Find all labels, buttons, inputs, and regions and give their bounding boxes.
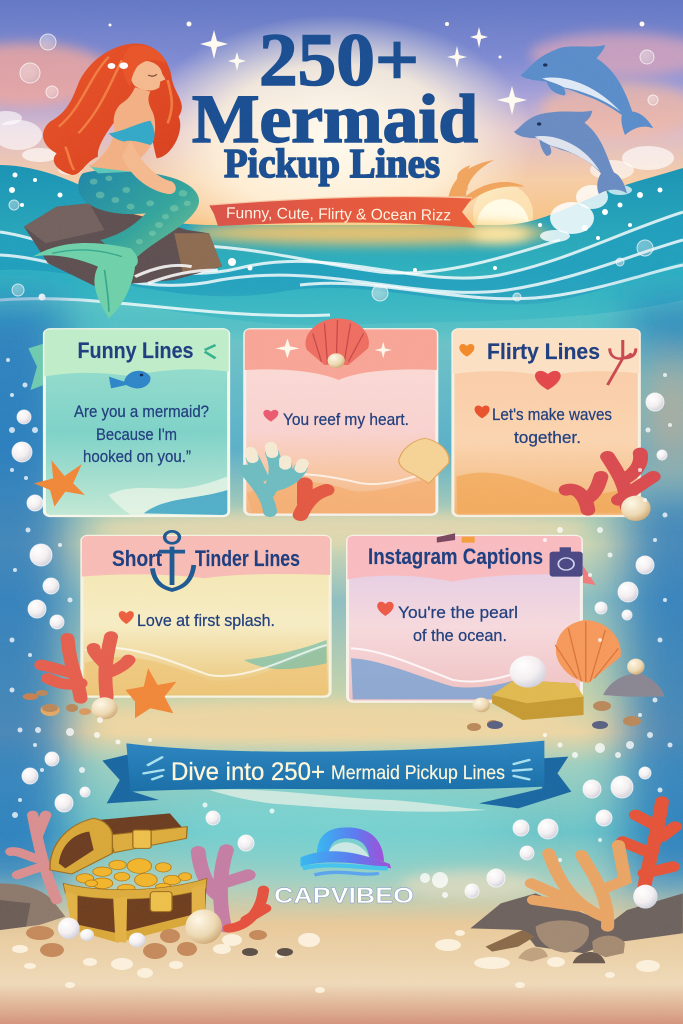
- fin: [33, 243, 138, 318]
- panel: flirty lines: [453, 329, 653, 521]
- heart icon: [263, 410, 278, 422]
- icon: scallop shell with pearl: [306, 318, 369, 368]
- banner text: Dive into 250+: [171, 758, 325, 786]
- icon: scallop: [555, 620, 621, 683]
- heart: [119, 611, 134, 624]
- banner text: Mermaid Pickup Lines: [331, 763, 505, 784]
- scale highlights: [90, 176, 191, 244]
- title: Mermaid: [192, 81, 478, 157]
- icon: coral: [566, 453, 653, 510]
- subtitle ribbon: [209, 196, 475, 228]
- icon: starfish: [125, 668, 176, 718]
- heading: Short: [112, 546, 163, 571]
- coral: orange right: [623, 802, 675, 887]
- arm and hand: [122, 140, 176, 194]
- quote text: Love at first splash.: [137, 611, 275, 630]
- mermaid: [33, 43, 199, 318]
- panel: funny lines: [28, 329, 229, 516]
- quote text: of the ocean.: [413, 626, 507, 645]
- icon: starfish on funny card: [34, 460, 85, 507]
- treasure chest: [50, 813, 207, 943]
- title: [192, 19, 478, 186]
- coral: pink left: [11, 815, 57, 900]
- coral and starfish cluster left: [23, 637, 176, 719]
- logo: capvibeo: [274, 827, 414, 908]
- small bubbles: [9, 34, 658, 301]
- banner text: [171, 758, 505, 786]
- fish icon: [109, 371, 150, 388]
- coral: red small: [229, 890, 266, 928]
- quote text: hooked on you.”: [83, 447, 191, 466]
- heading: Flirty Lines: [487, 339, 600, 364]
- hearts: [459, 344, 474, 357]
- logo mark: [300, 827, 391, 875]
- pebbles upper sand: [36, 690, 641, 731]
- sparkles: [108, 22, 644, 115]
- corals: [11, 802, 675, 928]
- torso: [89, 87, 155, 172]
- ribbon tail and card shapes: [28, 329, 229, 516]
- rock under mermaid: [24, 203, 222, 287]
- icon: anchor: [152, 531, 194, 590]
- pebbles on the sand: [12, 690, 660, 993]
- hair back: [43, 43, 182, 175]
- logo text: CAPVIBEO: [274, 883, 414, 908]
- title: Pickup Lines: [224, 140, 440, 186]
- heading: Funny Lines: [78, 338, 194, 363]
- gold coins: [76, 859, 192, 892]
- quote text: [398, 603, 518, 645]
- heading: Instagram Captions: [368, 544, 543, 569]
- lid wood: [98, 813, 187, 840]
- lid arch: [50, 818, 112, 874]
- heart: [377, 602, 394, 616]
- sparkles: [275, 338, 392, 358]
- seafloor rocks: [0, 883, 683, 963]
- pearls by the chest: [58, 885, 658, 947]
- quote text: together.: [514, 428, 581, 447]
- dolphin bottom: [514, 111, 627, 194]
- hair flowers: [108, 62, 128, 69]
- camera icon: [550, 547, 583, 577]
- rock: [603, 673, 664, 697]
- side shading: [0, 300, 683, 890]
- foam splashes: [0, 111, 674, 275]
- palm leaf decoration: [449, 160, 525, 203]
- pearl, shell and gold box cluster: [473, 620, 664, 720]
- bubbles around cards: [12, 393, 667, 898]
- quote text: Let's make waves: [492, 405, 612, 424]
- quote text: [74, 402, 209, 466]
- coral: cream right: [531, 845, 625, 927]
- panel: instagram captions: [348, 533, 596, 702]
- dolphin top: [520, 45, 653, 135]
- heading: Tinder Lines: [195, 546, 300, 571]
- subtitle ribbon: Funny, Cute, Flirty & Ocean Rizz: [226, 205, 451, 224]
- title: 250+: [259, 19, 419, 102]
- icon: coral: [246, 447, 327, 515]
- chest body: [63, 878, 207, 942]
- dolphins: [514, 45, 653, 194]
- ocean waves: [0, 165, 683, 355]
- heading: [112, 546, 300, 571]
- quote text: [492, 405, 612, 447]
- bottom banner: [102, 741, 571, 812]
- icon: gold box: [492, 680, 584, 720]
- bikini: [109, 121, 154, 145]
- icon: trident: [608, 340, 636, 385]
- lid gold strip: [109, 827, 187, 853]
- sun over the horizon: [473, 184, 533, 244]
- quote text: Are you a mermaid?: [74, 402, 209, 421]
- panel: you reef my heart: [244, 318, 449, 515]
- icon: shell: [399, 438, 449, 483]
- coral: purple middle: [198, 850, 248, 927]
- head: [130, 61, 165, 91]
- quote text: Because I'm: [96, 425, 177, 444]
- quote text: You're the pearl: [398, 603, 518, 622]
- quote text: You reef my heart.: [283, 410, 409, 429]
- tail: [78, 170, 199, 263]
- waist fringe: [89, 164, 133, 173]
- panel: short tinder lines: [82, 531, 330, 697]
- decorative dots: [6, 358, 672, 898]
